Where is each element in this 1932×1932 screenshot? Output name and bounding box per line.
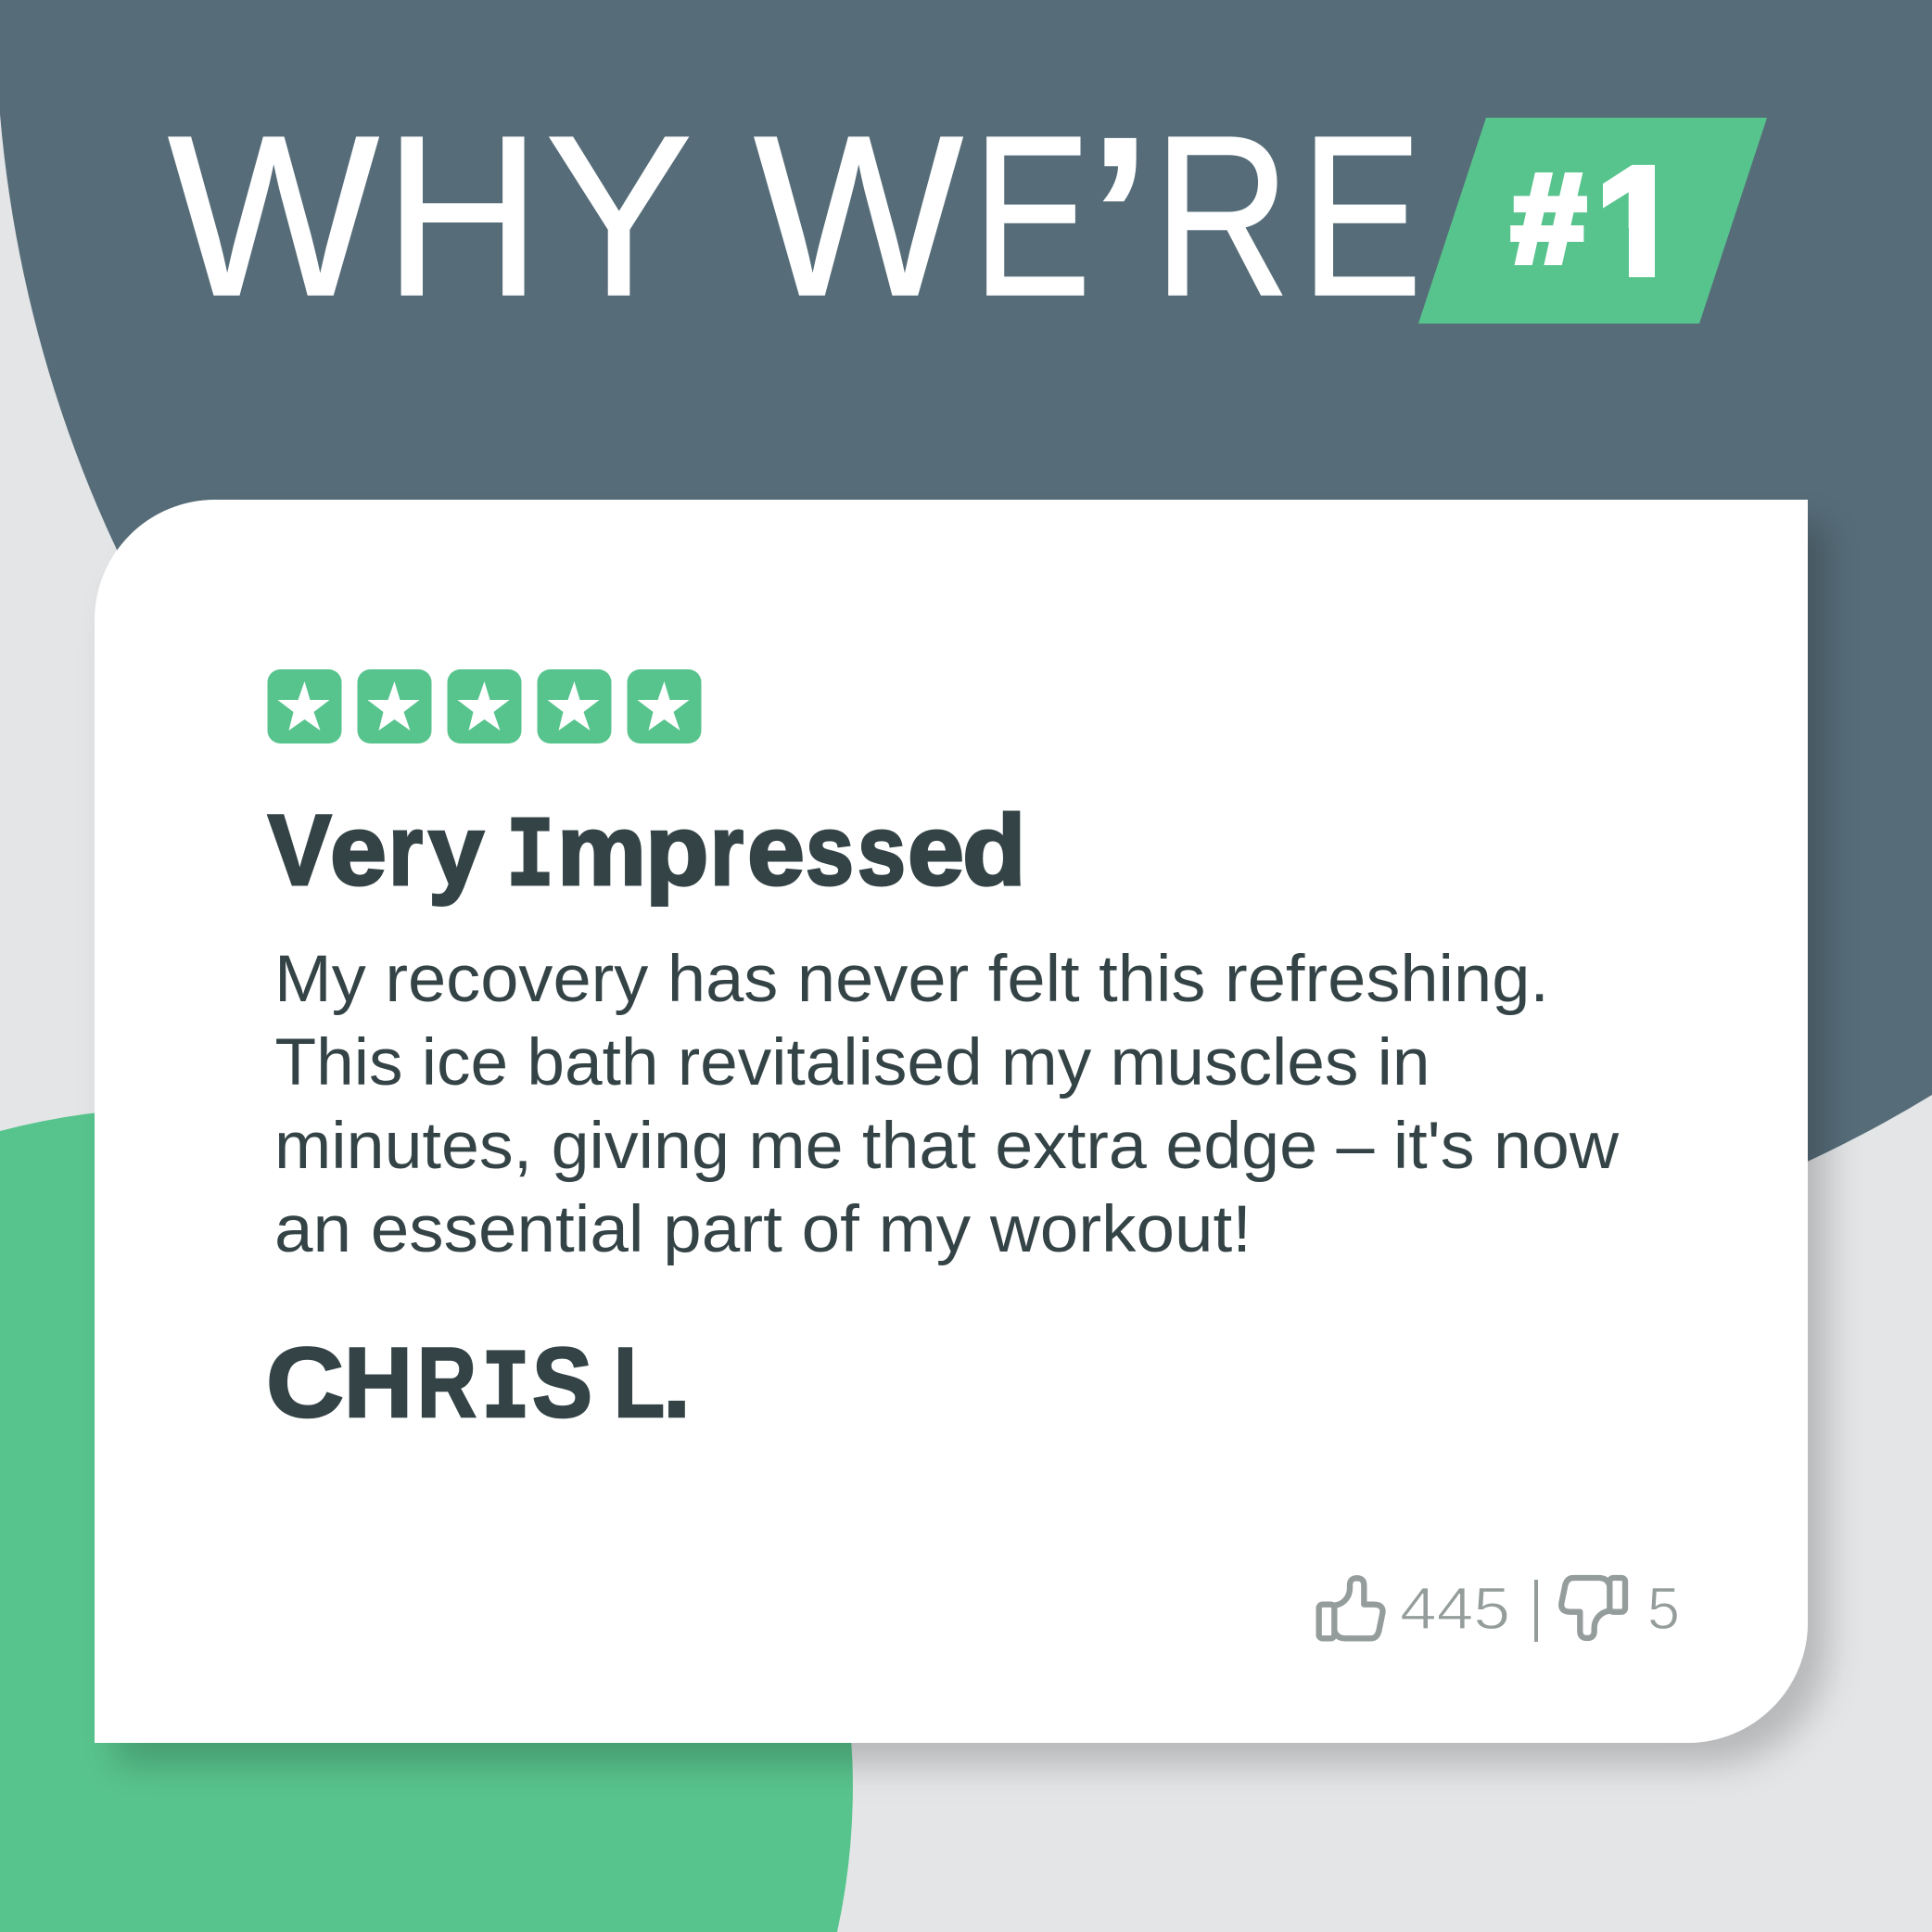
title: E xyxy=(972,88,1091,344)
dark slate circle xyxy=(0,0,1932,1281)
icon: thumbs up xyxy=(1319,1578,1382,1638)
review heading: r xyxy=(710,794,744,906)
star 4 xyxy=(538,669,612,744)
green circle xyxy=(0,1108,853,1932)
review body text: minutes, giving me that extra edge – it's now xyxy=(274,1110,1620,1183)
review heading: e xyxy=(908,794,964,906)
review heading: V xyxy=(268,794,332,906)
badge: #1: 1 xyxy=(1595,134,1682,309)
review body text: an essential part of my workout! xyxy=(274,1193,1252,1266)
star 5 xyxy=(627,669,701,744)
reviewer name: I xyxy=(481,1335,530,1447)
review body text xyxy=(274,943,1620,1266)
title: E xyxy=(1301,88,1422,344)
title: ’ xyxy=(1085,78,1155,389)
title: W xyxy=(168,88,379,344)
review heading: m xyxy=(557,794,646,906)
review heading: s xyxy=(806,794,854,906)
star 3 xyxy=(447,669,521,744)
reviewer name: H xyxy=(344,1327,413,1438)
upvote count: 445 xyxy=(1400,1575,1510,1642)
review heading: p xyxy=(645,794,709,906)
review heading: d xyxy=(962,794,1026,906)
star 2 xyxy=(358,669,432,744)
star rating xyxy=(267,669,701,744)
review heading: r xyxy=(388,794,423,906)
reviewer name: S xyxy=(532,1327,592,1438)
title: W xyxy=(754,88,963,344)
review heading: s xyxy=(858,794,906,906)
review heading: y xyxy=(428,794,484,906)
review votes xyxy=(1319,1575,1680,1642)
downvote count: 5 xyxy=(1647,1575,1680,1642)
review heading: e xyxy=(747,794,805,906)
title: R xyxy=(1153,88,1290,344)
star 1 xyxy=(267,669,341,744)
badge: #1 xyxy=(1418,118,1767,324)
divider bar xyxy=(1534,1580,1538,1642)
reviewer name: R xyxy=(417,1327,477,1438)
reviewer name: C xyxy=(266,1327,344,1438)
title: Y xyxy=(545,88,689,344)
reviewer name: . xyxy=(663,1327,691,1438)
reviewer name: L xyxy=(614,1327,665,1438)
review card xyxy=(95,500,1808,1743)
icon: thumbs down xyxy=(1561,1578,1625,1638)
review body text: This ice bath revitalised my muscles in xyxy=(274,1026,1430,1099)
badge: #1: # xyxy=(1512,148,1585,288)
review heading: I xyxy=(506,802,554,915)
review body text: My recovery has never felt this refreshing. xyxy=(274,943,1549,1016)
review heading: e xyxy=(330,794,387,906)
title: H xyxy=(384,88,541,344)
